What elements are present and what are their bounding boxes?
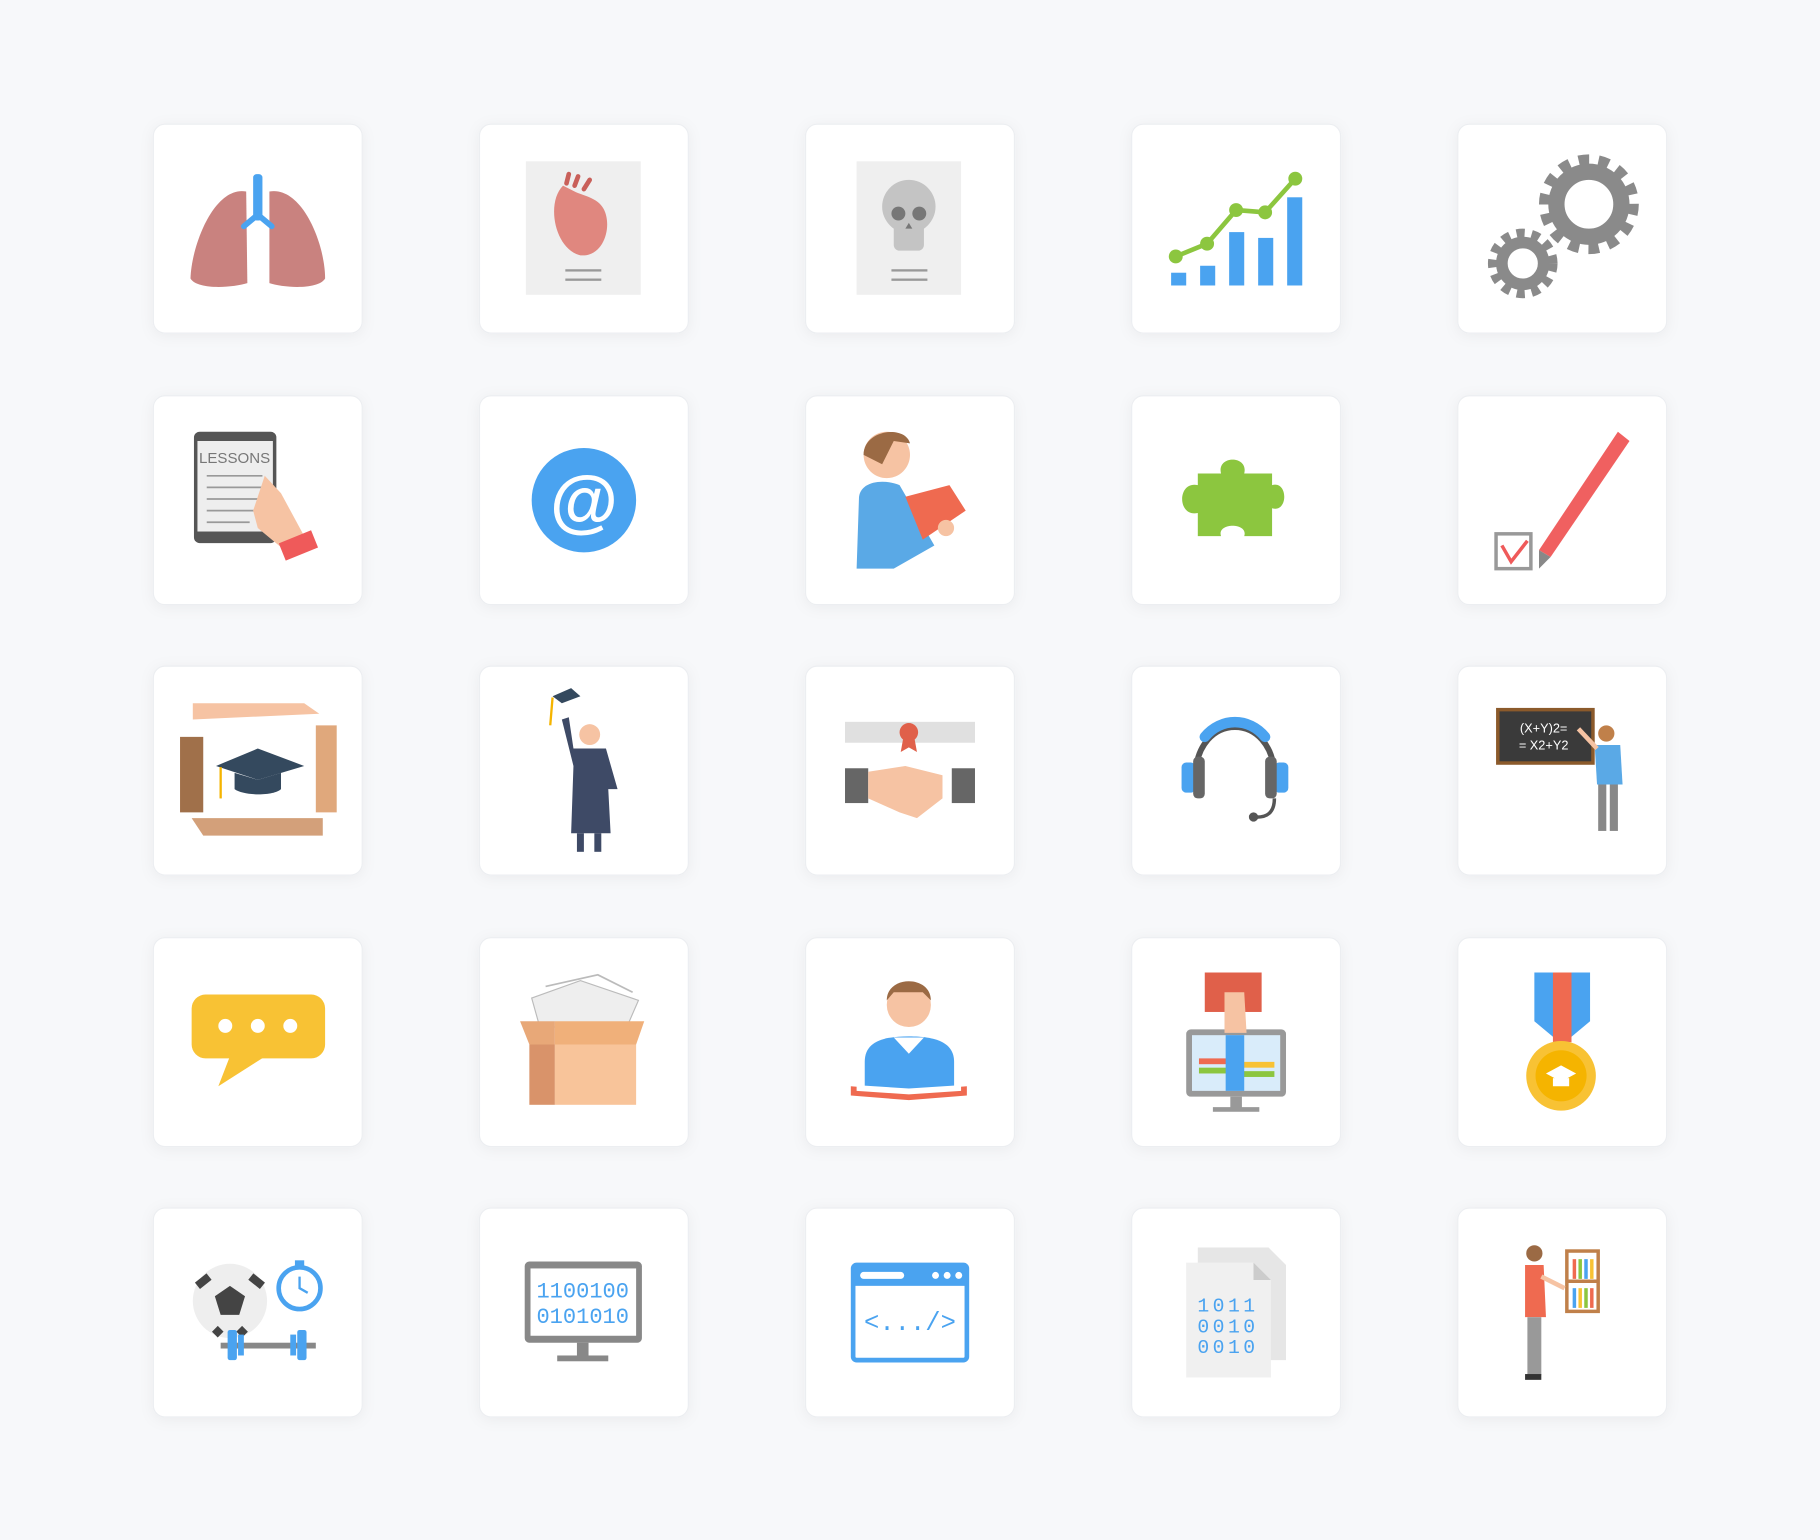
icon: binary monitor [525,1261,642,1361]
icon: binary file: 0010 [1197,1337,1259,1359]
cards [153,124,1667,1417]
icon: lungs [190,174,325,287]
icon: puzzle piece [1182,460,1284,536]
icon: librarian [1525,1245,1598,1380]
icon: sports [193,1260,320,1360]
icon: e-learning monitor [1186,973,1286,1112]
icon: code window: <.../> [864,1309,956,1338]
icon: heart x-ray [526,161,641,295]
icon: student with book [851,981,967,1100]
icon: code window [853,1265,967,1360]
icon: hands around graduation cap [180,703,337,836]
icon: lessons tablet: LESSONS [199,450,270,467]
icon: binary monitor: 1100100 [536,1279,629,1304]
icon: medal [1526,973,1596,1111]
icon: binary file [1186,1248,1286,1378]
icon: at sign [532,448,636,552]
icon: chalkboard teacher: (X+Y)2= [1520,720,1567,735]
icon: gears [1493,160,1633,294]
icon: person reading [857,432,966,569]
icon: at sign: @ [550,462,618,540]
icon: lessons tablet [194,432,318,561]
icon: box of papers [520,975,644,1105]
icon: chalkboard teacher [1496,708,1623,831]
icon: chalkboard teacher: = X2+Y2 [1519,738,1568,753]
icon: binary file: 0010 [1197,1316,1259,1338]
icon: binary monitor: 0101010 [536,1305,629,1330]
icon: handshake with diploma [845,722,975,818]
icon: chat bubble [192,995,325,1086]
icon: pen and checkbox [1496,432,1630,569]
icon: headset [1182,722,1288,822]
icon: growth chart [1169,172,1302,285]
icon: binary file: 1011 [1197,1295,1259,1317]
icon: graduate [550,688,618,852]
icon: skull x-ray [857,161,961,295]
